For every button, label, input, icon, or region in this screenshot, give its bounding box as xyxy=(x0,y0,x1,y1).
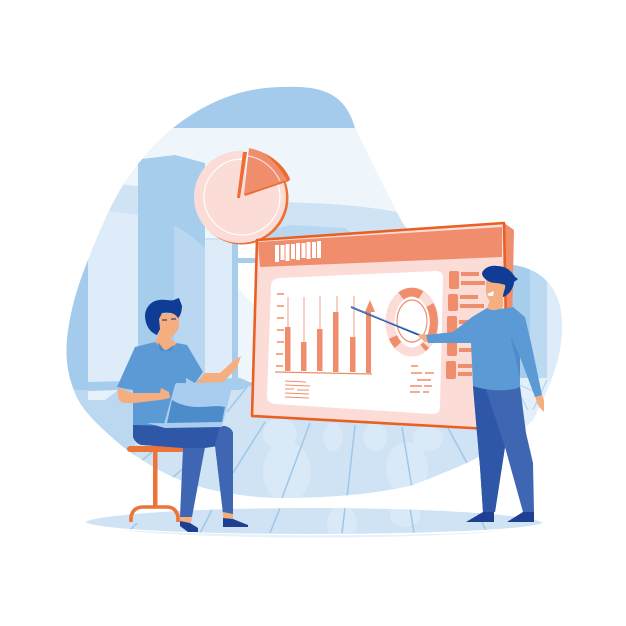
header tabs xyxy=(275,241,321,262)
head and hair xyxy=(145,298,182,338)
pie chart clock xyxy=(194,146,296,244)
shoes xyxy=(180,521,198,532)
pointing arm xyxy=(196,356,241,383)
shirt xyxy=(117,342,203,426)
seated man with laptop xyxy=(117,298,248,532)
laptop xyxy=(147,383,232,428)
sweater xyxy=(426,307,542,397)
standing man with pointer xyxy=(351,266,544,522)
pie slice xyxy=(237,148,290,198)
pointer xyxy=(351,307,424,337)
background blob room xyxy=(66,86,562,498)
chart panel xyxy=(267,271,443,414)
side list xyxy=(446,271,485,379)
illustration: two men analysing a chart board xyxy=(66,86,562,538)
donut chart xyxy=(390,292,434,352)
shoes xyxy=(466,512,494,522)
floor ellipse xyxy=(85,508,543,538)
head and hair xyxy=(482,266,518,303)
chart caption lines xyxy=(285,381,310,398)
hands xyxy=(535,395,544,412)
stool xyxy=(127,446,184,522)
presentation board xyxy=(252,223,514,430)
neck xyxy=(155,331,177,350)
floor highlights xyxy=(263,442,311,502)
legs xyxy=(473,386,534,512)
forearm xyxy=(118,388,170,403)
neck xyxy=(487,295,503,310)
bar chart xyxy=(275,294,375,374)
text lines right xyxy=(410,366,434,392)
legs xyxy=(133,425,233,517)
